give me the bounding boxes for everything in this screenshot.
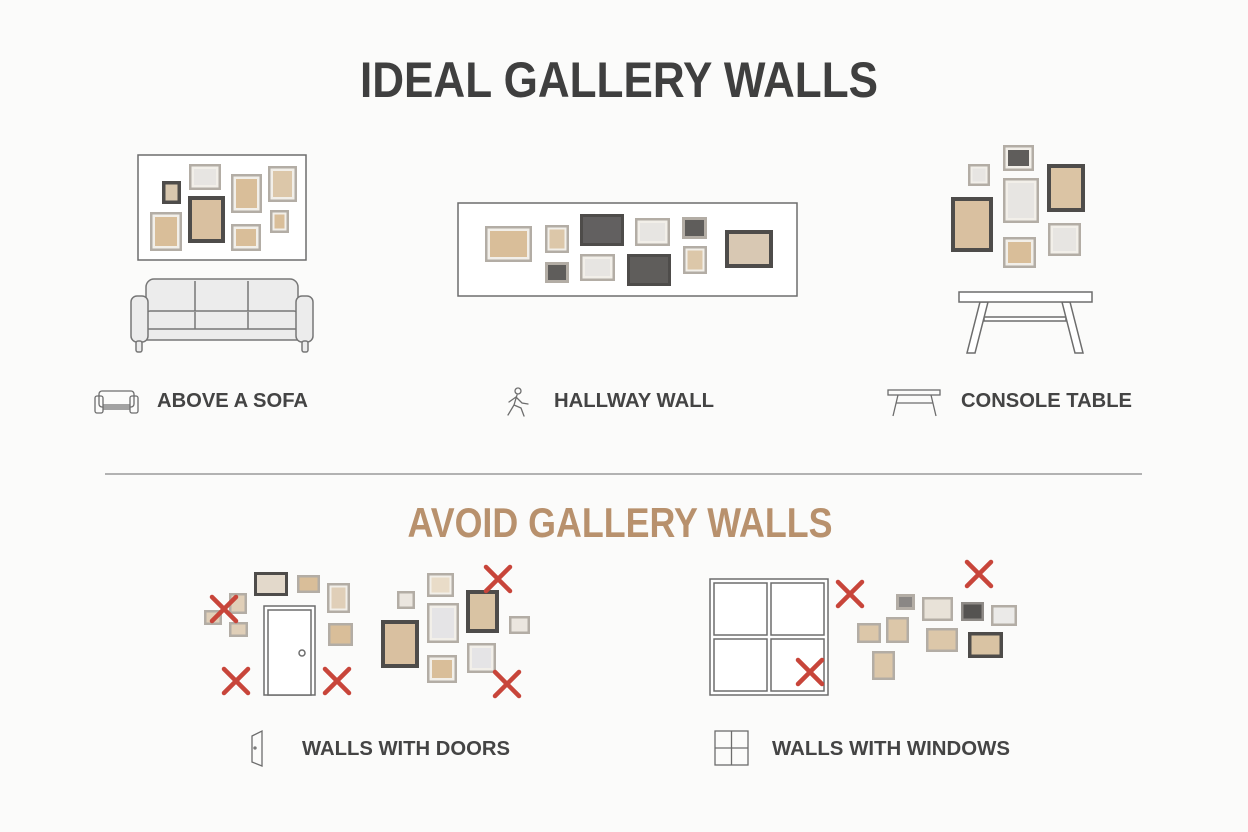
wall with frames <box>138 155 306 260</box>
icon: x marks <box>798 562 991 684</box>
label: walls with doors <box>252 731 510 766</box>
label: console table: CONSOLE TABLE <box>961 390 1132 412</box>
panel: walls with windows <box>710 562 1017 695</box>
title: IDEAL GALLERY WALLS <box>360 52 878 108</box>
table <box>959 292 1092 353</box>
panel: walls with doors <box>204 567 530 696</box>
panel: hallway wall <box>458 203 797 296</box>
sofa <box>131 279 313 352</box>
label: walls with windows: WALLS WITH WINDOWS <box>772 738 1010 760</box>
label: hallway wall: HALLWAY WALL <box>554 390 714 412</box>
frames around door <box>204 572 530 683</box>
door <box>264 606 315 695</box>
icon: x marks <box>212 567 519 696</box>
icon: table <box>888 390 940 416</box>
label: above a sofa <box>95 390 308 413</box>
frames cluster <box>951 145 1085 268</box>
label: above a sofa: ABOVE A SOFA <box>157 390 308 412</box>
label: walls with windows <box>715 731 1010 765</box>
panel: console table <box>951 145 1092 353</box>
icon: armchair <box>95 391 138 413</box>
label: walls with doors: WALLS WITH DOORS <box>302 738 510 760</box>
window <box>710 579 828 695</box>
icon: window <box>715 731 748 765</box>
frames beside window <box>857 594 1017 680</box>
icon: walking person <box>508 388 528 416</box>
label: console table <box>888 390 1132 416</box>
label: hallway wall <box>508 388 714 416</box>
panel: above a sofa <box>131 155 313 352</box>
icon: door <box>252 731 262 766</box>
heading: avoid: AVOID GALLERY WALLS <box>408 499 832 546</box>
